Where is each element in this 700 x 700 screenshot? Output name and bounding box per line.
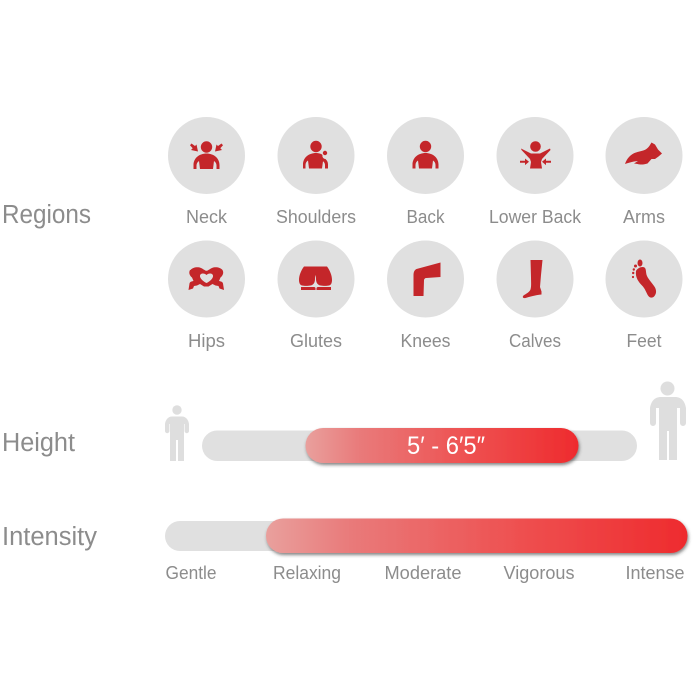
- icon: feet: [632, 260, 656, 298]
- region: Calves: [496, 240, 574, 351]
- heading: Height: Height: [2, 429, 75, 457]
- region: Arms: [606, 117, 682, 227]
- region: Knees: [387, 240, 464, 351]
- region: Hips: [168, 240, 245, 351]
- track: [202, 430, 637, 461]
- scale labels: Vigorous: [504, 563, 574, 583]
- label: Lower Back: [489, 207, 582, 227]
- height scale: [165, 382, 686, 463]
- icon: lower back: [520, 141, 551, 168]
- intensity scale: [165, 518, 688, 583]
- label: Feet: [626, 331, 662, 351]
- intensity bar: [266, 518, 688, 553]
- label: Hips: [188, 331, 225, 351]
- icon: back: [412, 141, 438, 168]
- label: Neck: [186, 207, 228, 227]
- scale labels: Gentle: [166, 563, 216, 583]
- icon: shoulders: [303, 141, 328, 168]
- region: Neck: [168, 117, 245, 227]
- region: Lower Back: [489, 117, 582, 227]
- region: Shoulders: [276, 117, 356, 227]
- icon: tall person: [650, 382, 686, 460]
- heading: Regions: Regions: [2, 201, 91, 229]
- label: Calves: [509, 331, 561, 351]
- scale labels: [166, 563, 684, 583]
- label: Back: [406, 207, 445, 227]
- label: Glutes: [290, 331, 342, 351]
- heading: Intensity: Intensity: [2, 523, 97, 551]
- icon: knees: [414, 262, 440, 296]
- range bar: [306, 428, 578, 463]
- icon: glutes: [299, 266, 332, 290]
- icon: small person: [165, 405, 189, 461]
- track: [165, 521, 295, 551]
- region: Feet: [606, 240, 682, 351]
- icon: neck: [190, 141, 223, 169]
- icon: hips: [188, 267, 224, 290]
- label: Shoulders: [276, 207, 356, 227]
- label: Knees: [400, 331, 450, 351]
- label: Arms: [623, 207, 665, 227]
- icon: arms: [625, 142, 662, 165]
- scale labels: Relaxing: [273, 563, 341, 583]
- scale labels: Moderate: [384, 563, 462, 583]
- scale labels: Intense: [626, 563, 684, 583]
- icon: calves: [523, 260, 542, 298]
- region: Glutes: [278, 240, 354, 351]
- range value: 5′ - 6′5″: [407, 432, 485, 460]
- region: Back: [387, 117, 464, 227]
